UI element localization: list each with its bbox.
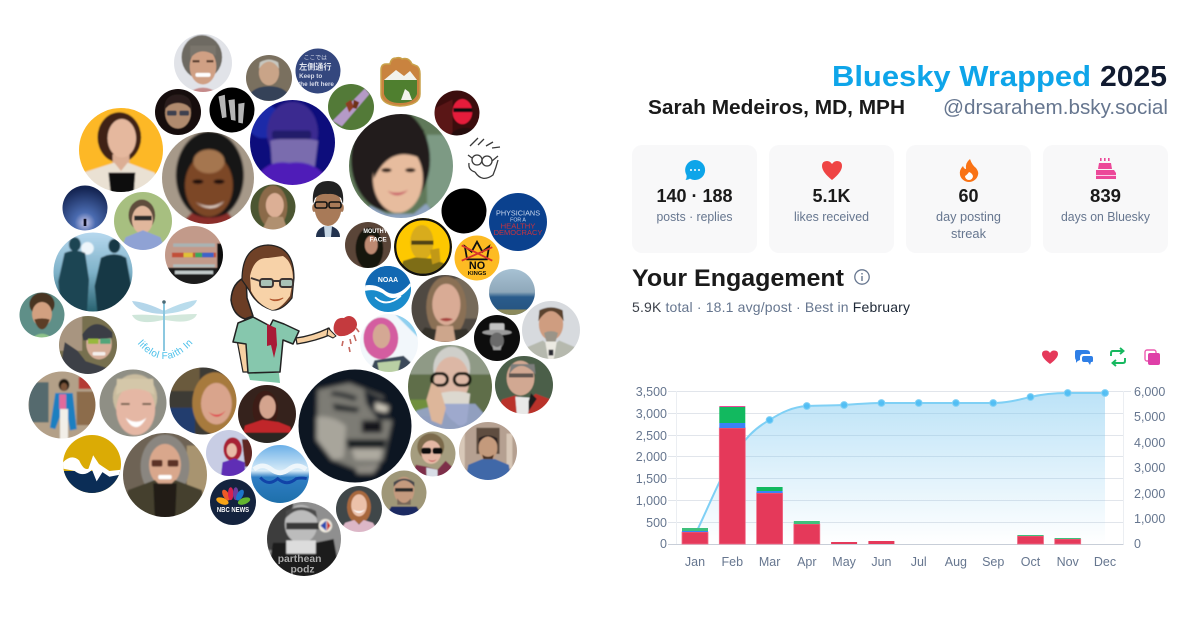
cumulative line	[695, 393, 1105, 535]
avatar: black and white man: podz	[290, 564, 315, 575]
avatar: Physicians for a Healthy Democracy: HEALTHY	[501, 223, 536, 230]
left axis labels: 3,500	[636, 385, 667, 399]
engagement summary: 5.9K total · 18.1 avg/post · Best in February	[632, 299, 910, 315]
avatar: man in hat, black and white	[474, 315, 520, 361]
right axis labels	[1134, 385, 1165, 551]
avatar: woman in glasses, garden	[114, 192, 172, 250]
left axis labels: 2,500	[636, 429, 667, 443]
bar: Nov	[1055, 538, 1081, 544]
avatar: NBC News logo: NBC NEWS	[217, 507, 249, 514]
avatar: bald man in blue light	[250, 100, 335, 185]
avatar: NOAA logo	[365, 266, 411, 312]
avatar: solid black circle	[442, 188, 486, 234]
avatar: woman in helmet and sunglasses	[59, 316, 117, 374]
avatar: man in plaid shirt, archway	[459, 422, 517, 480]
bar: Jun	[868, 541, 894, 544]
bar: Oct	[1018, 535, 1044, 544]
bitmoji blood stain	[267, 324, 277, 358]
avatar: woman with curly hair	[170, 368, 236, 434]
month labels: Jun	[871, 555, 892, 569]
month labels: Oct	[1021, 555, 1041, 569]
month labels: Aug	[945, 555, 967, 569]
avatar: Keep to the left sign	[293, 46, 343, 96]
avatar: woman with braids	[162, 132, 254, 224]
month labels: Jul	[911, 555, 927, 569]
avatar: man in red jacket	[495, 356, 553, 414]
avatar: man with glasses, navy shirt	[382, 470, 426, 516]
avatar: black and white man	[267, 502, 341, 576]
avatar: NBC News logo	[210, 479, 256, 525]
avatar: blue sky and sea	[251, 445, 309, 503]
avatar: bald man on yellow, duotone	[394, 218, 452, 276]
bitmoji arm	[296, 328, 332, 344]
bitmoji ponytail	[231, 277, 253, 319]
avatar: No Kings badge: NO	[469, 260, 485, 272]
avatar: hand-drawn doodle face	[468, 138, 500, 178]
avatar: Keep to the left sign: 左側通行	[299, 62, 331, 72]
bar: Feb	[719, 406, 745, 544]
avatar: woman with long dark hair, meme caption: MOUTHY	[363, 228, 388, 235]
avatar: butterfly on flowers	[326, 82, 376, 132]
legend icon: quotes	[1145, 350, 1160, 365]
avatar: bearded man with round glasses	[408, 345, 492, 429]
avatar: grey-haired man in jacket	[246, 55, 292, 101]
icon: flame	[960, 159, 978, 182]
avatar: woman in blue coat, library	[28, 372, 96, 438]
avatar: two silhouettes	[54, 232, 132, 312]
avatar: grey-haired woman	[174, 34, 232, 92]
legend icon: likes	[1042, 350, 1058, 364]
right axis labels: 2,000	[1134, 487, 1165, 501]
right axis labels: 4,000	[1134, 436, 1165, 450]
avatar cluster	[20, 34, 580, 576]
avatar: Keep to the left sign: Keep to	[299, 73, 322, 80]
card: days on Bluesky: days on Bluesky	[1061, 209, 1150, 224]
engagement chart	[636, 385, 1165, 569]
avatar: bracelets on wrist	[165, 226, 223, 284]
avatar: No Kings badge	[454, 236, 500, 280]
chart grid	[668, 391, 1131, 544]
left axis labels: 0	[660, 537, 667, 551]
avatar: Asian woman, dark hair	[344, 108, 458, 223]
bitmoji: doctor with heart in hand	[231, 245, 359, 383]
avatar: woman on yellow	[79, 108, 163, 192]
card: days on Bluesky: 839	[1090, 186, 1121, 206]
avatar: Keep to the left sign: ここでは	[304, 54, 327, 61]
bitmoji shirt	[233, 317, 299, 373]
logo: dragonfly: lifelol Faith In	[138, 339, 192, 359]
bitmoji head	[242, 245, 294, 310]
avatar: smiling blonde woman	[100, 370, 166, 436]
bar: Mar	[757, 487, 783, 544]
card: day posting streak: streak	[951, 226, 986, 241]
section heading: Your Engagement: Your Engagement	[632, 265, 844, 292]
chart legend	[1042, 348, 1160, 366]
icon: cake	[1096, 158, 1116, 179]
left axis labels: 3,000	[636, 407, 667, 421]
bitmoji glasses	[260, 279, 293, 287]
bar: May	[831, 542, 857, 544]
avatar: Physicians for a Healthy Democracy: DEMOCRACY	[494, 230, 543, 237]
avatar: No Kings badge: KINGS	[468, 271, 486, 277]
left axis labels: 1,500	[636, 472, 667, 486]
line markers	[766, 390, 1108, 423]
month labels: Feb	[722, 555, 743, 569]
bitmoji legs	[248, 373, 280, 383]
month labels: May	[832, 555, 857, 569]
avatar: hand-shaped crest logo	[381, 58, 420, 106]
month labels: Dec	[1094, 555, 1116, 569]
avatar: Physicians for a Healthy Democracy: PHYSICIANS	[496, 209, 540, 218]
bar: Jan	[682, 528, 708, 544]
card: likes received	[769, 145, 894, 253]
avatar: Physicians for a Healthy Democracy	[486, 190, 550, 254]
legend icon: reposts	[1111, 348, 1125, 366]
user handle: @drsarahem.bsky.social	[943, 97, 1168, 119]
left axis labels	[636, 385, 667, 551]
header	[648, 61, 1168, 119]
avatar: woman with auburn hair, pink blouse	[336, 486, 382, 532]
avatar: close-up dark portrait	[298, 370, 412, 482]
month labels: Jan	[685, 555, 705, 569]
avatar: woman in red, TV still	[238, 385, 296, 443]
month labels: Nov	[1057, 555, 1080, 569]
left axis labels: 500	[646, 516, 667, 530]
avatar: EM logo	[63, 435, 121, 493]
avatar: woman with brown hair	[412, 275, 478, 342]
month labels: Apr	[797, 555, 817, 569]
month labels	[685, 555, 1116, 569]
avatar: blue forest	[62, 186, 108, 230]
avatar: man in dark glasses, black background	[155, 89, 201, 135]
left axis labels: 1,000	[636, 494, 667, 508]
avatar: man in suit with goatee	[522, 301, 580, 359]
right axis labels: 0	[1134, 537, 1141, 551]
icon: info	[855, 270, 869, 284]
avatar: black and white man: parthean	[278, 554, 321, 565]
card: day posting streak: 60	[958, 186, 978, 206]
legend icon: replies	[1075, 350, 1093, 365]
avatar: coastal landscape	[489, 269, 535, 315]
avatar: woman in sunglasses	[410, 432, 456, 476]
card: likes received: likes received	[794, 209, 869, 224]
card: days on Bluesky	[1043, 145, 1168, 253]
icon: chat bubble	[685, 160, 705, 180]
bar: Apr	[794, 521, 820, 544]
avatar: Physicians for a Healthy Democracy: FOR A	[510, 217, 526, 223]
title: Bluesky Wrapped	[832, 61, 1091, 93]
card: likes received: 5.1K	[812, 186, 850, 206]
month labels: Mar	[759, 555, 780, 569]
avatar: pink-haired woman	[360, 314, 418, 372]
bars	[682, 406, 1081, 544]
avatar: NOAA logo: NOAA	[378, 277, 398, 284]
card: day posting streak: day posting	[936, 209, 1001, 224]
logo: dragonfly	[132, 300, 197, 359]
right axis labels: 1,000	[1134, 512, 1165, 526]
card: posts and replies: 140 · 188	[656, 186, 732, 206]
bitmoji heart	[334, 316, 357, 336]
avatar: curly-haired man	[20, 292, 64, 338]
avatar: woman with long brown hair	[250, 184, 296, 230]
title: 2025	[1100, 61, 1167, 93]
right axis labels: 6,000	[1134, 385, 1165, 399]
avatar: cartoon man with glasses	[312, 181, 344, 237]
avatar: Keep to the left sign: the left here	[298, 81, 334, 88]
month labels: Sep	[982, 555, 1004, 569]
card: posts and replies	[632, 145, 757, 253]
avatar: W logo on black	[210, 88, 254, 132]
avatar: man in red light	[432, 88, 482, 138]
cumulative area	[695, 393, 1105, 544]
right axis labels: 5,000	[1134, 410, 1165, 424]
avatar: red-haired woman in purple	[206, 430, 252, 476]
card: posts and replies: posts · replies	[656, 209, 733, 224]
card: day posting streak	[906, 145, 1031, 253]
avatar: woman with gray curly hair and glasses	[123, 433, 207, 517]
stat cards	[632, 145, 1168, 253]
icon: heart	[822, 161, 842, 180]
right axis labels: 3,000	[1134, 461, 1165, 475]
avatar: woman with long dark hair, meme caption: FACE	[370, 236, 387, 243]
avatar: woman with long dark hair, meme caption	[343, 220, 393, 270]
user name: Sarah Medeiros, MD, MPH	[648, 97, 905, 119]
left axis labels: 2,000	[636, 450, 667, 464]
